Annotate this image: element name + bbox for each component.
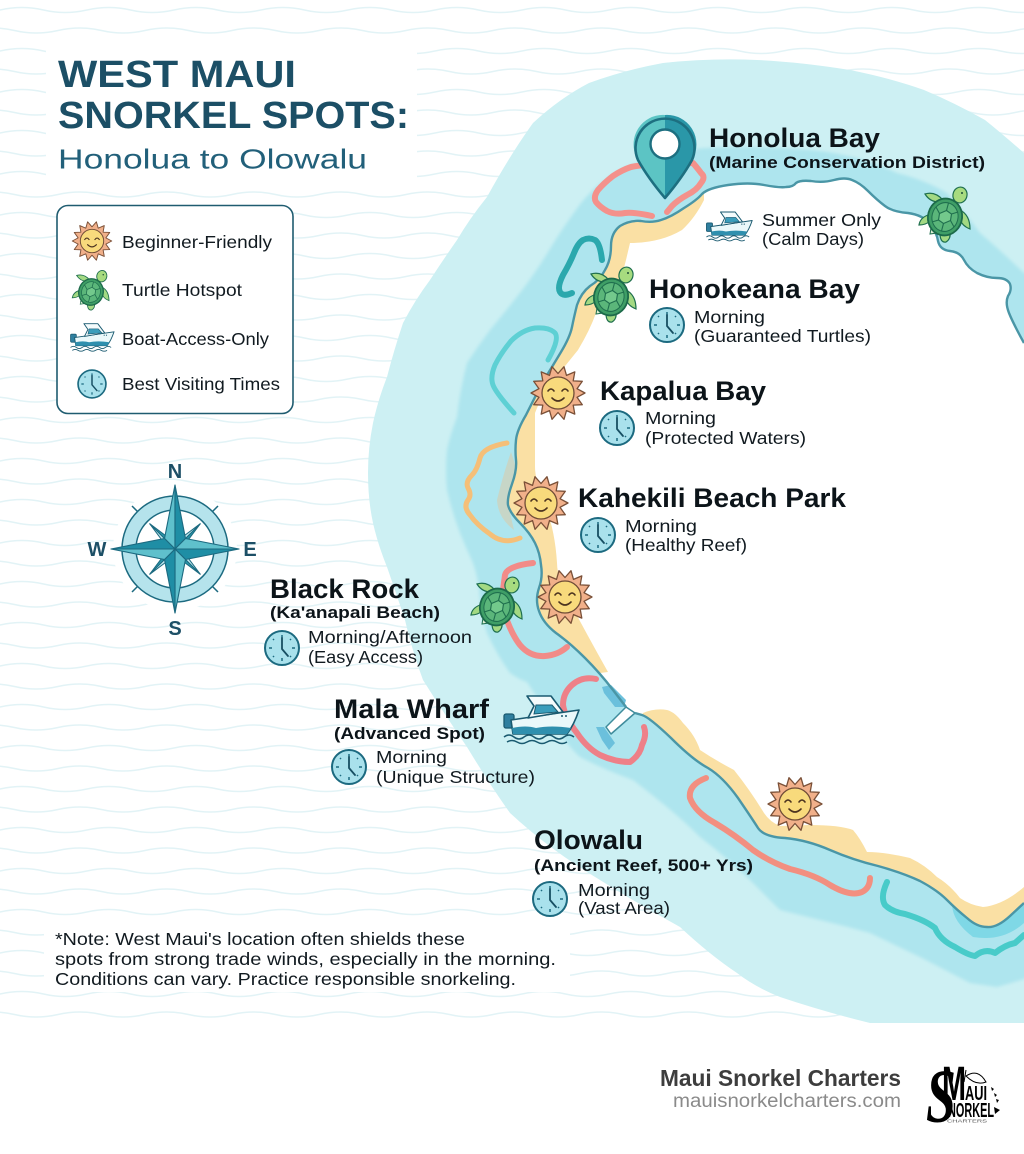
icon: turtle north-east bbox=[919, 185, 970, 242]
beach: southern sand strip bbox=[642, 709, 1024, 927]
Honolua Bay visiting note bbox=[762, 210, 881, 249]
spot: Honolua Bay label: Honolua Bay bbox=[709, 123, 880, 153]
spot: Honolua Bay label bbox=[709, 123, 985, 172]
Kahekili Beach Park visiting note: Morning bbox=[625, 516, 697, 536]
compass rose bbox=[88, 461, 257, 640]
legend panel bbox=[57, 206, 293, 414]
Mala Wharf visiting note bbox=[376, 747, 535, 787]
Mala Wharf visiting note: (Unique Structure) bbox=[376, 767, 535, 787]
footnote: Conditions can vary. Practice responsible snorkeling. bbox=[55, 969, 516, 989]
footnote: spots from strong trade winds, especially in the morning. bbox=[55, 949, 556, 969]
compass rose: S bbox=[168, 618, 182, 640]
footer: brand name and website bbox=[660, 1065, 901, 1112]
Honolua Bay visiting note: (Calm Days) bbox=[762, 229, 864, 249]
icon: sun at Black Rock bbox=[538, 571, 592, 623]
icon: clock at Black Rock bbox=[265, 631, 299, 665]
spot: Black Rock label: Black Rock bbox=[270, 574, 420, 604]
footer: Maui Snorkel Charters logo: CHARTERS bbox=[947, 1118, 987, 1124]
spot: Mala Wharf label: (Advanced Spot) bbox=[334, 724, 485, 743]
title bbox=[58, 54, 409, 174]
icon: clock at Kapalua Bay bbox=[600, 411, 634, 445]
harbor: blue shoal shapes bbox=[596, 685, 626, 750]
spot: Kahekili Beach Park label: Kahekili Beach Park bbox=[578, 483, 847, 513]
footer: Maui Snorkel Charters logo: M bbox=[942, 1058, 966, 1111]
coastline bbox=[508, 178, 1024, 707]
Honolua Bay visiting note: Summer Only bbox=[762, 210, 881, 230]
spot: Olowalu label: (Ancient Reef, 500+ Yrs) bbox=[534, 856, 753, 875]
compass rose: W bbox=[88, 539, 107, 561]
ocean: outer shallow water band bbox=[368, 59, 1024, 1023]
legend icon: clock bbox=[78, 370, 106, 398]
spot: Black Rock label: (Ka'anapali Beach) bbox=[270, 603, 440, 622]
icon: turtle at Black Rock bbox=[471, 575, 522, 632]
title: Honolua to Olowalu bbox=[58, 144, 367, 174]
footer: Maui Snorkel Charters logo: S bbox=[926, 1055, 956, 1139]
icon: clock at Kahekili Beach Park bbox=[581, 518, 615, 552]
Kapalua Bay visiting note: Morning bbox=[645, 408, 716, 428]
title: WEST MAUI bbox=[58, 54, 296, 96]
Kapalua Bay visiting note bbox=[645, 408, 806, 448]
icon: sun near Olowalu bbox=[768, 778, 822, 830]
icon: clock at Honokeana Bay bbox=[650, 308, 684, 342]
icon: clock at Mala Wharf bbox=[332, 750, 366, 784]
icon: sun at Kahekili Beach Park bbox=[514, 477, 568, 529]
spot: Mala Wharf label bbox=[334, 694, 490, 743]
island: West Maui land bbox=[508, 178, 1024, 927]
legend label: best visiting times: Best Visiting Times bbox=[122, 374, 280, 394]
reef: grey shallow patch bbox=[497, 452, 517, 530]
compass rose: E bbox=[243, 539, 257, 561]
spot: Honokeana Bay label: Honokeana Bay bbox=[649, 274, 860, 304]
reefs: coloured coral outlines bbox=[466, 163, 1024, 956]
Kahekili Beach Park visiting note: (Healthy Reef) bbox=[625, 535, 747, 555]
Black Rock visiting note: (Easy Access) bbox=[308, 647, 423, 667]
beach: northern sand strip bbox=[508, 192, 704, 673]
Honokeana Bay visiting note: Morning bbox=[694, 307, 765, 327]
footnote: *Note: West Maui's location often shields these bbox=[55, 929, 465, 949]
footer: Maui Snorkel Charters logo bbox=[926, 1055, 1000, 1139]
icon: sun at Kapalua Bay bbox=[531, 367, 585, 419]
ocean: inner reef water band bbox=[446, 147, 1024, 987]
coastline: south of the pier bbox=[635, 713, 1024, 927]
spot: Olowalu label bbox=[534, 825, 753, 875]
icon: boat at Mala Wharf bbox=[504, 696, 579, 744]
Honokeana Bay visiting note bbox=[694, 307, 871, 346]
spot: Honolua Bay label: (Marine Conservation District) bbox=[709, 153, 985, 172]
spot: Olowalu label: Olowalu bbox=[534, 825, 643, 855]
ocean: deep patch near southern coast bbox=[952, 905, 1024, 938]
legend icon: sun bbox=[72, 222, 112, 260]
icon: map pin at Honolua Bay bbox=[634, 115, 696, 198]
Olowalu visiting note: Morning bbox=[578, 880, 650, 900]
pier: Mala Wharf bbox=[606, 707, 635, 734]
icon: turtle at Honokeana Bay bbox=[585, 265, 636, 322]
icon: clock at Olowalu bbox=[533, 882, 567, 916]
legend label: boat access: Boat-Access-Only bbox=[122, 329, 269, 349]
footer: Maui Snorkel Charters logo: AUI bbox=[965, 1083, 987, 1105]
Kahekili Beach Park visiting note bbox=[625, 516, 747, 555]
title: SNORKEL SPOTS: bbox=[58, 95, 409, 137]
icon: boat at Honolua Bay bbox=[706, 212, 752, 241]
footnote bbox=[55, 929, 556, 989]
spot: Black Rock label bbox=[270, 574, 440, 622]
legend icon: turtle bbox=[72, 269, 109, 310]
Black Rock visiting note: Morning/Afternoon bbox=[308, 627, 472, 647]
Honokeana Bay visiting note: (Guaranteed Turtles) bbox=[694, 326, 871, 346]
Mala Wharf visiting note: Morning bbox=[376, 747, 447, 767]
Olowalu visiting note bbox=[578, 880, 670, 918]
legend icon: boat bbox=[71, 324, 114, 351]
footer: brand name and website: mauisnorkelcharters.com bbox=[673, 1091, 901, 1112]
Olowalu visiting note: (Vast Area) bbox=[578, 898, 670, 918]
spot: Mala Wharf label: Mala Wharf bbox=[334, 694, 490, 724]
footer: brand name and website: Maui Snorkel Charters bbox=[660, 1065, 901, 1091]
legend label: turtle hotspot: Turtle Hotspot bbox=[122, 280, 242, 300]
spot: Kapalua Bay label: Kapalua Bay bbox=[600, 376, 766, 406]
legend label: beginner-friendly: Beginner-Friendly bbox=[122, 232, 272, 252]
Black Rock visiting note bbox=[308, 627, 472, 667]
Kapalua Bay visiting note: (Protected Waters) bbox=[645, 428, 806, 448]
compass rose: N bbox=[168, 461, 182, 483]
